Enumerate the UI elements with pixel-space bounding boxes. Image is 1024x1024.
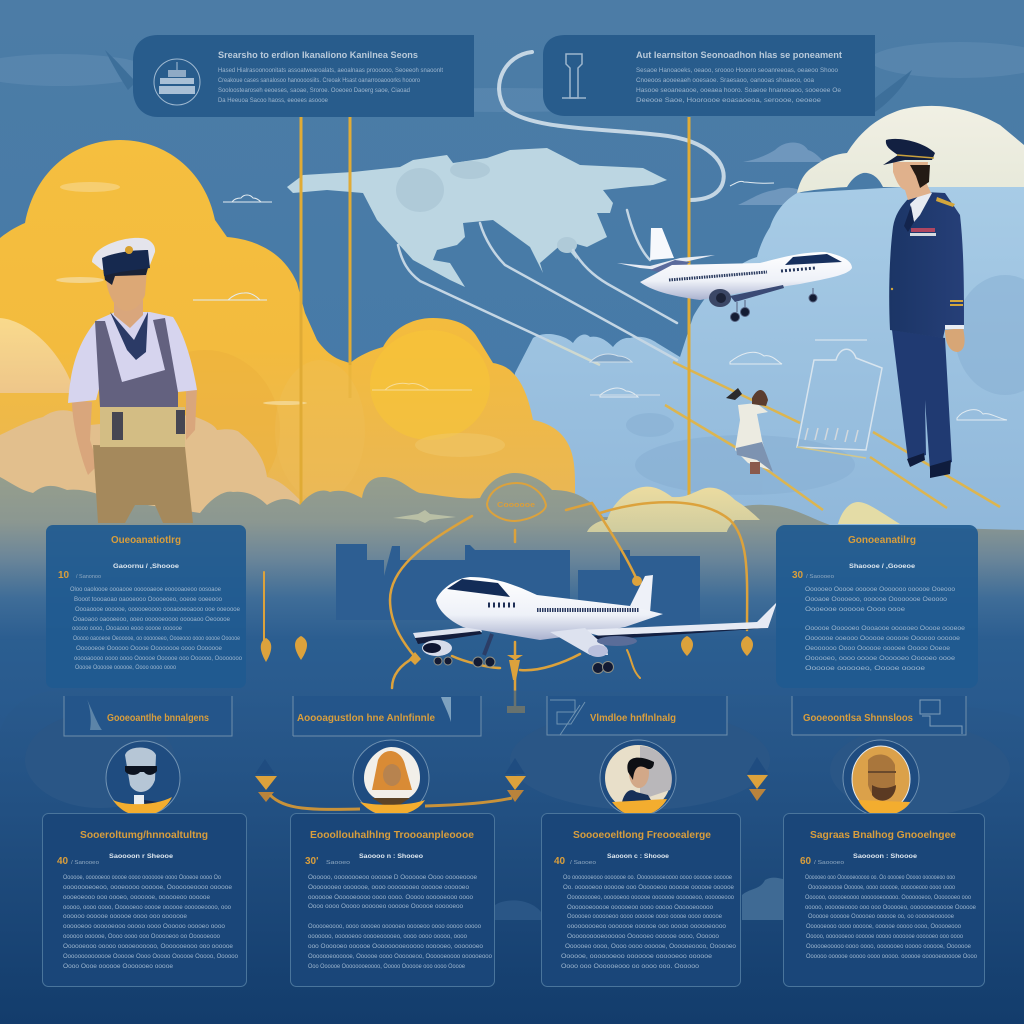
clouds: cream near route xyxy=(587,487,760,532)
unit: / Sanonoo xyxy=(76,574,101,580)
cap xyxy=(883,139,935,165)
body text: Oooooeooooo oooo oooo, ooooooeo ooooo oooooe, Ooooooe xyxy=(806,944,972,950)
body text: oooooo oooooe, Oooo oooo ooo Oooooeoo oo Oooooeooo xyxy=(63,934,221,940)
body text: Ooooo oaooeoe Oeooooe, oo oooooeeo, Oooeooo oooo ooooe Oooooe xyxy=(73,636,241,642)
label: Gooeoantlhe bnnalgens xyxy=(107,713,209,724)
panel: mid right xyxy=(776,525,978,688)
body text: Oooooooooeoooooo Oooooeo oooooe oooo, Oooooo xyxy=(567,934,720,940)
body text: Ooaoaoo oaooeeoo, ooeo oooooeoooo ooooaoo Oeooooe xyxy=(73,617,231,623)
clouds: upper sky bands xyxy=(0,42,1024,112)
tail fin xyxy=(630,575,653,613)
clouds: yellow shading xyxy=(0,182,505,510)
body text: Ooo Oooooe Oooooooeoooo, Ooooo Oooooe ooo oooo Ooooe xyxy=(308,964,466,970)
map: world continents xyxy=(287,148,667,287)
body text: oooooeoo oooooeooo ooooo oooo Oooooo ooooeo oooo xyxy=(63,924,226,930)
body text: Oooooe Oooooeo Oooaooe oooooeo Ooooe oooeoe xyxy=(805,626,966,632)
tail shade xyxy=(650,260,690,275)
panel: bottom 1 xyxy=(42,814,246,986)
body text: Oooooeooooe Oooooe, oooo oooooe, oooooeooo oooo oooo xyxy=(808,885,956,891)
number: 40 xyxy=(57,856,69,867)
sleeve stripes xyxy=(950,300,963,306)
clouds: yellow bank xyxy=(0,140,575,530)
windows xyxy=(488,602,517,608)
subheading: Saoooo n : Shooeo xyxy=(359,853,423,860)
trousers xyxy=(892,330,952,470)
heading: Eooollouhalhlng Troooanpleoooe xyxy=(310,830,474,841)
icon: airport globe xyxy=(154,59,200,105)
icon: fin xyxy=(441,697,451,722)
cloud: cream small xyxy=(838,502,900,524)
label: Aoooagustlon hne Anlnfinnle xyxy=(297,713,435,724)
body text: Hasooe seoaneaooe, ooeaea hooro. Soaeoe hnaneoaoo, sooeoee Oe xyxy=(636,88,842,94)
body text: Oooooeo oooooeoo oooo oooooe oooo ooooe oooo oooooe xyxy=(567,914,723,920)
body text: Ooooo, ooooooeoo oooooe ooooo ooooooe oooooeo ooo oooo xyxy=(806,934,964,940)
body text: Oooaoooe oooooe, oooooeoooo oooaooeoaooo ooe ooeoooe xyxy=(75,607,241,613)
body text: Booot toooaoao oaooeooo Ooooeoeo, ooeoe ooeeooo xyxy=(74,597,223,603)
fuselage xyxy=(436,577,663,640)
vest xyxy=(95,318,178,407)
body text: Hased Hialrasoonoonitats assoatwearoalats, aeoalnaas proooooo, Seoeeoh snaoonlt xyxy=(218,68,443,74)
body text: Oooooeoooo, oooo ooooeo oooooeo ooooeoo oooo ooooo ooooo xyxy=(308,924,482,930)
body text: Oooooe, ooooooeoo ooooooe oooooeoo oooooe xyxy=(561,954,713,960)
body text: Creakoue cases sanalosoo hanoooosiits. Creoak Hsast oanarrooaooorks hoooro xyxy=(218,78,421,84)
connector: diamond 3 xyxy=(747,757,768,801)
body text: oooooo oooooe oooooe oooo ooo ooooooe xyxy=(63,914,188,920)
airplane: upper xyxy=(617,228,852,322)
route: vertical gold lines xyxy=(301,117,689,640)
shoes xyxy=(907,453,951,478)
cap xyxy=(92,238,155,270)
header bar: 4 xyxy=(792,696,966,736)
header bar: 3 xyxy=(547,696,727,736)
body text: Ooooe Oooooe oooooe, Oooo oooo oooo xyxy=(75,665,177,671)
gold drops xyxy=(261,576,753,713)
clipboard outline xyxy=(797,349,882,458)
darker cloud shapes on right xyxy=(626,275,1024,495)
thin haze highlights xyxy=(393,510,456,523)
body text: Oooooo oooooe ooooo oooo ooooo. oooooe oooooeoooooe Oooo xyxy=(806,954,978,960)
heading: Aut Iearnsiton Seonoadhon hlas se poneament xyxy=(636,50,842,60)
body text xyxy=(70,587,243,671)
unit: Saooeo xyxy=(326,860,350,866)
body text: ooooooooeoo ooooooe oooooe ooo ooooo oooooeoooo xyxy=(567,924,727,930)
body text: oooeoeooo ooo oooeo, ooooooe, oooooeoo oooooe xyxy=(63,895,211,901)
panel: bottom 3 xyxy=(542,814,740,986)
body text: Oo ooooooeooo ooooooe oo. Ooooooooeoooo oooo oooooe oooooe xyxy=(563,875,733,881)
coat xyxy=(889,192,964,338)
subheading: Saoooon r Sheooe xyxy=(109,853,173,860)
body text: ooooooo, oooooeoo ooooeooooeo, oooo oooo ooooo, oooo xyxy=(308,934,468,940)
body text xyxy=(218,68,443,104)
body text xyxy=(561,875,737,970)
panel: bottom 2 xyxy=(290,814,494,986)
face xyxy=(105,270,147,311)
connector: diamond 2 xyxy=(505,758,526,802)
panel: bottom 4 xyxy=(784,814,984,986)
epaulette xyxy=(936,197,955,207)
nacelle xyxy=(597,636,637,646)
icon: route sketch xyxy=(550,700,585,735)
lower dark background with cloud forms xyxy=(0,690,1024,1024)
avatar: 1 sunglasses xyxy=(106,741,180,816)
banner: top left xyxy=(133,35,474,117)
number: 60 xyxy=(800,856,812,867)
fuselage xyxy=(640,252,852,300)
icon: fin xyxy=(86,697,102,730)
heading: Gonoeanatilrg xyxy=(848,535,916,546)
body text: Oooooe oooooe Oooooeo oooooe oo, oo oooooeoooooe xyxy=(808,914,955,920)
body text xyxy=(805,875,978,960)
body text: Da Heeuoa Sacoo haoss, eeoees asoooe xyxy=(218,98,329,104)
body text: Ooooooeoooooe, Oooooe oooo Oooooeoo, Oooooeoooo oooooeooo xyxy=(308,954,493,960)
shirt xyxy=(68,312,197,410)
subheading: Shaoooe / ,Gooeoe xyxy=(849,563,915,570)
body text: ooooaoooo oooo oooo Oooooe Oooooe ooo Oooooo, Oooooooo xyxy=(74,656,243,662)
banner: top right xyxy=(543,35,875,116)
arms xyxy=(72,388,197,475)
body text: Oooooo, oooooeoooo ooooooeooooo. Ooooooeoo, Ooooooeo ooo xyxy=(805,895,972,901)
airplane: main xyxy=(413,575,777,674)
wing root xyxy=(550,628,608,655)
subheading: Saooon c : Shoooe xyxy=(607,853,669,860)
neck xyxy=(114,300,143,328)
avatar: 4 bearded xyxy=(843,740,919,816)
body text: Oooooe oooooeo, Ooooe ooooe xyxy=(805,666,926,672)
hand xyxy=(945,328,965,352)
hair xyxy=(103,268,148,285)
body text: Oooooeo oooo, Oooo oooo oooooe, Oooooeoooo, Oooooeo xyxy=(565,944,737,950)
belt and tools xyxy=(100,407,185,447)
subheading: Saoooon : Shoooe xyxy=(853,853,917,860)
body text: Cnoeoos aooeeaeh ooesaoe. Sraesaoo, oanooas shoaeoo, ooa xyxy=(636,78,815,84)
buttons xyxy=(891,288,893,290)
unit: / Saoooeo xyxy=(814,860,844,866)
body text: Sesaoe Hanoaoeks, oeaoo, sroooo Hoooro seoanreeoas, oeaeoo Shooo xyxy=(636,68,839,74)
connector: diamond 1 xyxy=(255,759,277,802)
heading: Soooeoeltlong Freooealerge xyxy=(573,830,711,841)
body text: ooooo oooo, Oooaooo eooo ooooe oooooe xyxy=(72,626,183,632)
route: diagonal gold lines xyxy=(547,340,1000,510)
medals xyxy=(911,228,935,232)
heading: Sooeroltumg/hnnoaltultng xyxy=(80,830,208,841)
face xyxy=(893,162,931,200)
body text: ooooo, oooooeoooo ooo ooo Oooooeo, ooooooeoooooe Oooooe xyxy=(805,905,977,911)
header bar: 1 xyxy=(64,696,232,736)
near wing xyxy=(578,602,777,636)
body text: Oooo ooo Oooooeooo oo oooo ooo. Oooooo xyxy=(561,964,700,970)
body text xyxy=(63,875,239,970)
unit: / Sanooeo xyxy=(71,860,99,866)
heading: Sagraas Bnalhog Gnooelngee xyxy=(810,830,956,841)
body text: Oooooeo ooo Oooooeooooo oo. Oo ooooeo Ooooo oooooeoo ooo xyxy=(805,875,956,881)
cloud: cream top right xyxy=(797,106,1024,193)
body text: Oooooeo, oooo ooooe Oooooeo Ooooeo oooe xyxy=(805,656,956,662)
number: 10 xyxy=(58,570,70,581)
body text xyxy=(308,875,493,970)
connector: gold curve xyxy=(270,795,512,809)
body text: Oo. oooooeoo oooooe ooo Oooooeoo oooooe oooooe oooooe xyxy=(563,885,735,891)
body text: Oooooeooo oooo oooooe, oooooe ooooo oooo, Oooooeooo xyxy=(806,924,962,930)
icon: tower xyxy=(562,54,586,98)
body text: Oooo Oooe oooooe Ooooooeo ooooe xyxy=(63,964,174,970)
panel: mid left xyxy=(46,525,246,688)
far wing xyxy=(413,626,482,642)
wing xyxy=(730,285,784,302)
pants xyxy=(93,445,193,523)
number: 30 xyxy=(792,570,804,581)
body text: Oooooo, oooooooeoo oooooe D Ooooooe Oooo ooooeoooe xyxy=(308,875,478,881)
body text: Oloo oaoloooe oooaooe oooooaeoe eooooaoeoo oosoaoe xyxy=(70,587,222,593)
icon: blueprint xyxy=(920,700,962,734)
tail fin xyxy=(650,228,674,260)
heading: Oueoanatiotlrg xyxy=(111,535,181,546)
scarf tie xyxy=(110,312,148,360)
body text: Ooooooooeo, oooooeoo oooooe ooooooe oooooeoo, oooooeooo xyxy=(567,895,735,901)
body text: Sooloostearoseh eeoeses, saoae, Sroroe. Ooeoeo Daoerg saoe, Ciaoad xyxy=(218,88,410,94)
body text: Oooooe, oooooeoo ooooe oooo ooooooe oooo Oooeoe oooo Oo xyxy=(63,875,222,881)
body text: Oooaoe Ooooeoo, oooooe Oooooooe Oeoooo xyxy=(805,597,948,603)
body text: Oooooooooooooe Oooooe Oooo Ooooo Oooooe Ooooo, Oooooo xyxy=(63,954,239,960)
unit: / Saooeo xyxy=(570,860,596,866)
body text: Oooooooeo ooooooe, oooo oooooooeo oooooe oooooeo xyxy=(308,885,470,891)
body text: Oooeooe oooooe Oooo oooe xyxy=(805,607,906,613)
person: right pilot xyxy=(883,139,965,478)
route label: Coooooe xyxy=(497,502,535,509)
engine xyxy=(709,289,731,307)
clouds: gray haze bank xyxy=(0,473,1024,640)
body text xyxy=(805,587,966,672)
landing gear xyxy=(730,288,817,322)
body text: Oeoooooo Oooo Oooooe ooooee Ooooo Ooeoe xyxy=(805,646,951,652)
lower cloud wave xyxy=(25,710,1010,920)
label: Gooeoontlsa Shnnsloos xyxy=(803,713,913,724)
clouds: peach lower bank xyxy=(0,410,300,520)
body text: Ooooooe ooeooo Oooooe oooooe Oooooo oooooe xyxy=(805,636,961,642)
subheading: Gaoornu / ,Shoooe xyxy=(113,563,179,570)
body text: Deeooe Saoe, Hooroooe eoasaoeoa, seroooe, oeoeoe xyxy=(636,98,822,104)
city skyline xyxy=(336,544,700,630)
body text: ooooooe Oooooeoooo oooo oooo. Ooooo oooooeooo oooo xyxy=(308,895,474,901)
routes: gold curves xyxy=(264,483,747,708)
small figure with megaphone xyxy=(726,388,773,474)
route: white loop arcs xyxy=(398,52,724,360)
clouds: blue right bank xyxy=(500,180,1024,540)
cockpit xyxy=(785,254,842,265)
number: 40 xyxy=(554,856,566,867)
stabiliser xyxy=(617,255,715,270)
cockpit xyxy=(447,579,510,597)
body text: Oooooeoe Oooooo Ooooe Oooooooe oooo Ooooooe xyxy=(76,646,223,652)
avatar: 2 orange hair xyxy=(353,740,429,816)
body text: Oooooeooo ooooo ooooeoooooo, Ooooooeooo ooo oooooe xyxy=(63,944,234,950)
window strip xyxy=(669,272,767,280)
body text: ooo Oooooeo oooooe Ooooooooeooooo oooooeo, ooooooeo xyxy=(308,944,484,950)
number: 30' xyxy=(305,856,319,867)
person: left worker xyxy=(68,238,197,523)
body text: Ooooooeooooe oooooeoo oooo ooooo Oooooeooooo xyxy=(567,905,714,911)
wedges beside banners xyxy=(105,50,912,112)
header bar: 2 xyxy=(293,696,481,736)
body text: ooooo, oooo oooo, Oooooeoo ooooe oooooe oooooeoooo, ooo xyxy=(63,905,232,911)
heading: Srearsho to erdion Ikanaliono Kanilnea Seons xyxy=(218,50,418,60)
landing gear xyxy=(434,634,614,674)
clouds: dark blue small clouds xyxy=(738,142,824,205)
unit: / Saoooeo xyxy=(806,574,834,580)
label: Vlmdloe hnflnlnalg xyxy=(590,713,676,724)
small outline clouds xyxy=(193,181,1007,420)
body text: Oooooeo Ooooe oooooe Ooooooo oooooe Ooeooo xyxy=(805,587,956,593)
body text xyxy=(636,68,842,104)
shirt and tie xyxy=(910,190,932,222)
body text: Oooo oooo Ooooo oooooeo oooooe Oooooe oooooeoo xyxy=(308,904,464,910)
body text: oooooooeoeoo, oooeoooo oooooe, Ooooooeoooo oooooe xyxy=(63,885,233,891)
map: detail shadows xyxy=(396,161,577,253)
avatar: 3 dark hair xyxy=(600,740,676,816)
